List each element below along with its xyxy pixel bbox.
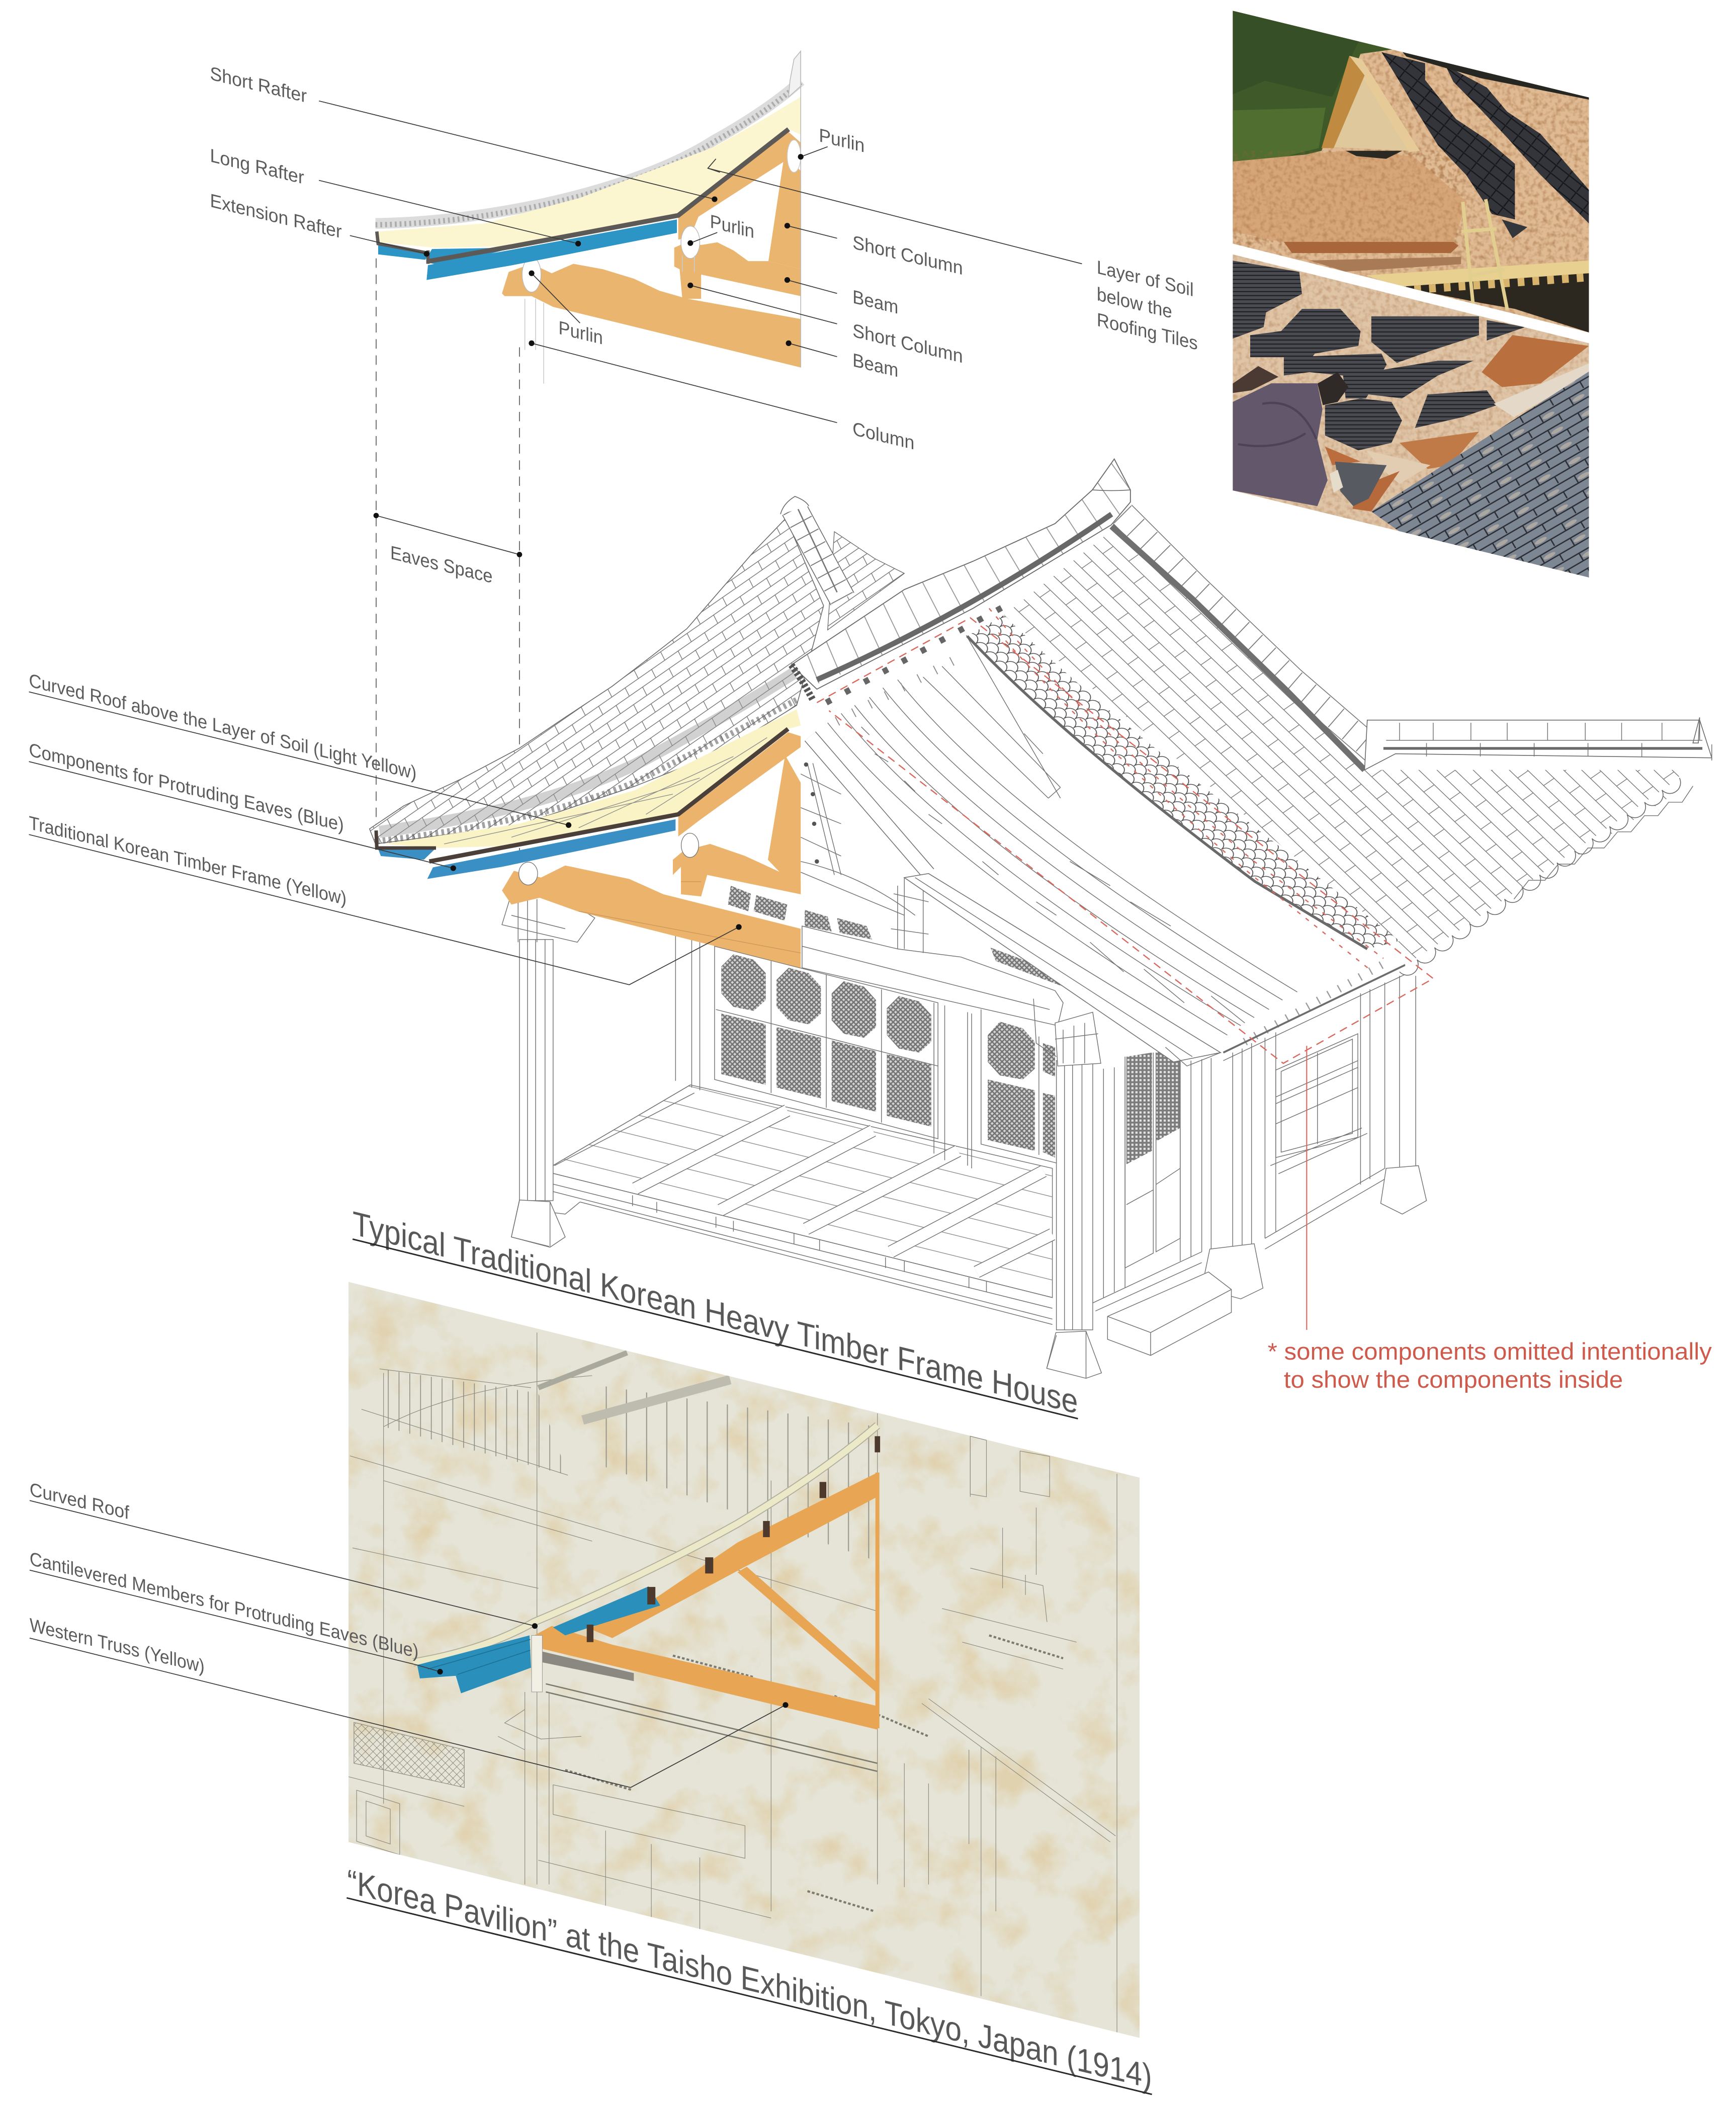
labels: detail section: Column [852, 418, 914, 454]
labels: house section: Components for Protruding Eaves (Blue) [29, 739, 344, 836]
small hip ridge at rear [780, 496, 842, 599]
soil layer light yellow [378, 97, 801, 247]
orange timber frame [502, 732, 801, 968]
labels: detail section: Short Column [852, 232, 963, 279]
exposed rafter area of main roof [817, 605, 1393, 1053]
side wall [1093, 976, 1416, 1311]
dark rafters [429, 729, 788, 862]
column heads [502, 894, 1101, 1066]
right ridge [1364, 717, 1712, 770]
porch floor [544, 1085, 1053, 1324]
main beam over porch [802, 926, 1063, 1026]
house drawing: typical Korean heavy timber frame house [370, 459, 1712, 1378]
labels: house section: Traditional Korean Timber Frame (Yellow) [29, 812, 346, 909]
blue eaves components [427, 819, 675, 879]
side door [1125, 1047, 1180, 1268]
roof tile strip [376, 81, 801, 223]
faint drafted lines [388, 1370, 561, 1474]
labels: detail section: Roofing Tiles [1097, 309, 1198, 355]
red omitted note with pointer [1268, 1046, 1712, 1393]
gray member and white post [542, 1652, 634, 1681]
left roof tiles [370, 518, 904, 844]
orange western truss [534, 1473, 880, 1730]
labels: house section [29, 670, 416, 909]
verge board and eave line [810, 736, 1405, 1066]
labels: detail section: Purlin [819, 125, 864, 157]
title: house: Typical Traditional Korean Heavy Timber Frame House [353, 1205, 1078, 1421]
labels: detail section [210, 63, 1198, 454]
leader lines: house section [29, 692, 742, 985]
red omitted note with pointer: to show the components inside [1284, 1366, 1623, 1393]
porch back wall posts [675, 929, 972, 1168]
side window [1270, 1034, 1367, 1174]
labels: house section: Curved Roof above the Layer of Soil (Light Yellow) [29, 670, 416, 784]
hip ridge main [1111, 514, 1381, 770]
inner scallop band [967, 615, 1400, 949]
columns [511, 940, 1101, 1378]
labels: pavilion section: Western Truss (Yellow) [30, 1615, 205, 1677]
labels: detail section: Short Column [852, 320, 963, 368]
eaves space dimension [374, 259, 522, 862]
labels: detail section: Extension Rafter [210, 190, 342, 243]
labels: pavilion section [30, 1479, 418, 1677]
yellow soil layer in house section [376, 709, 801, 968]
curved roof band [413, 1425, 878, 1662]
labels: pavilion section: Curved Roof [30, 1479, 129, 1524]
main roof tiles [967, 532, 1693, 975]
labels: detail section: Beam [852, 350, 898, 382]
leader lines and dots for detail section [319, 101, 1082, 423]
main ridge [791, 459, 1131, 700]
blue eave components [426, 219, 677, 280]
lattice windows [715, 946, 1062, 1164]
old drawing panel: Korea Pavilion section [349, 1279, 1140, 2041]
labels: detail section: Beam [852, 287, 898, 318]
photo: soil layer on roof under construction [1233, 0, 1589, 336]
ridge ornament [789, 51, 801, 97]
red dashed outline of omitted components [817, 618, 1433, 1063]
detail section: layered roof above timber frame [376, 51, 801, 384]
labels: detail section: Layer of Soil [1097, 257, 1194, 301]
labels: detail section: Short Rafter [210, 63, 307, 107]
red omitted note with pointer: * some components omitted intentionally [1268, 1338, 1712, 1365]
rafters dark [429, 129, 789, 261]
upper structure behind gable [728, 727, 1085, 992]
bases for corner and far columns [1107, 1165, 1427, 1356]
timber frame orange [502, 132, 801, 368]
purlin circles [522, 257, 541, 292]
labels: pavilion section: Cantilevered Members for Protruding Eaves (Blue) [30, 1548, 418, 1662]
red dashed strip through tiles [989, 609, 1383, 972]
paper stains [349, 1279, 1140, 2041]
eaves space dimension: Eaves Space [390, 542, 492, 587]
photo: laying roof tiles on soil [1233, 255, 1589, 577]
labels: detail section: Purlin [710, 211, 754, 242]
labels: detail section: below the [1097, 284, 1172, 323]
dark purlin blocks [587, 1436, 880, 1642]
leader lines: pavilion section [30, 1500, 789, 1788]
labels: detail section: Long Rafter [210, 145, 304, 189]
eave scallops [1400, 778, 1681, 975]
blue cantilevered members [417, 1586, 660, 1693]
labels: detail section: Purlin [559, 317, 603, 349]
